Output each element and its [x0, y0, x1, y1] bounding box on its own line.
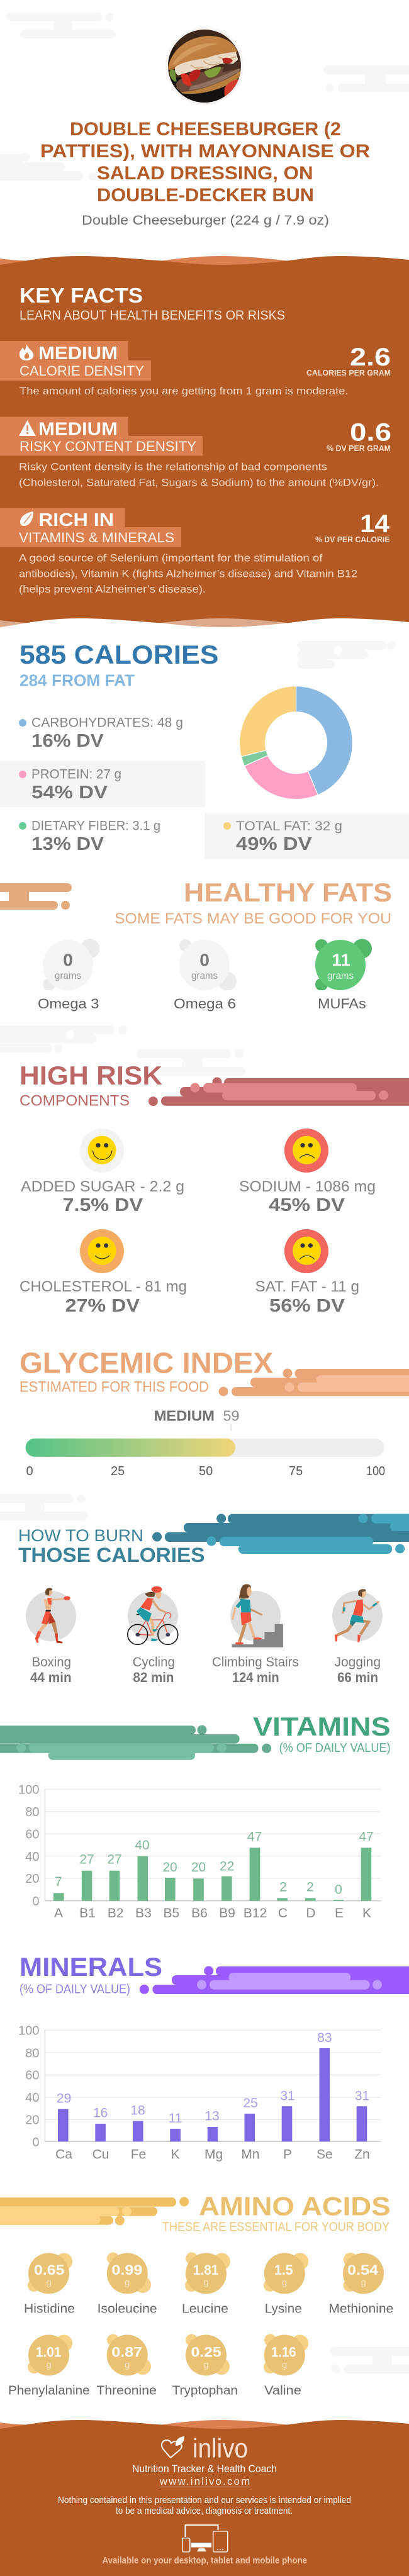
- bubble: omega 3: 0: [63, 951, 73, 970]
- activity: boxing: Boxing: [32, 1655, 71, 1670]
- bar chart: vitamins: 47: [359, 1830, 374, 1844]
- bar chart: minerals: Ca: [55, 2148, 72, 2162]
- bar chart: vitamins: 20: [162, 1860, 177, 1875]
- bar chart: vitamins: C: [278, 1906, 288, 1921]
- bubble: histidine: [24, 2253, 75, 2316]
- activity: climbing stairs: [212, 1584, 299, 1685]
- fact: rich in vitamins and minerals: A good source of Selenium (important for the stimulation of: [19, 552, 323, 564]
- heading: key facts: LEARN ABOUT HEALTH BENEFITS OR RISKS: [20, 308, 285, 323]
- bubble: methionine: g: [361, 2277, 366, 2288]
- bubble: histidine: Histidine: [24, 2302, 75, 2316]
- title: [40, 119, 370, 206]
- text: disclaimer: Nothing contained in this presentation and our services is intended or implied: [58, 2495, 351, 2506]
- icon: woman on stairs: [232, 1584, 283, 1648]
- heading: high risk: COMPONENTS: [20, 1093, 130, 1110]
- bar chart: vitamins: D: [306, 1906, 316, 1921]
- icon: flame: [20, 344, 33, 360]
- bubble: valine: [264, 2334, 308, 2398]
- bar chart: minerals: 100: [18, 2024, 39, 2038]
- fact: calorie density: MEDIUM: [38, 343, 118, 364]
- title: PATTIES), WITH MAYONNAISE OR: [40, 141, 370, 162]
- heading: minerals: MINERALS: [20, 1952, 162, 1982]
- bubble: omega 3: grams: [55, 971, 81, 981]
- bar chart: minerals: 83: [317, 2031, 332, 2045]
- bubble: isoleucine: g: [125, 2277, 130, 2288]
- item: sodium: [239, 1129, 376, 1215]
- bar chart: vitamins: 7: [55, 1875, 62, 1889]
- legend: dietary fiber: DIETARY FIBER: 3.1 g: [31, 819, 160, 834]
- bar chart: vitamins: B5: [164, 1906, 179, 1921]
- heading: burn calories: [18, 1526, 205, 1566]
- decorative band: [0, 1725, 271, 1760]
- bar chart: minerals: 29: [57, 2091, 71, 2105]
- heading: burn calories: HOW TO BURN: [18, 1526, 143, 1545]
- legend: total fat: TOTAL FAT: 32 g: [236, 819, 342, 834]
- bubble: lysine: g: [282, 2277, 287, 2288]
- fact: calorie density: [0, 341, 391, 397]
- activity: climbing stairs: Climbing Stairs: [212, 1655, 299, 1670]
- gauge: glycemic value: 59: [223, 1408, 239, 1424]
- item: added sugar: 7.5% DV: [63, 1195, 143, 1215]
- bar chart: vitamins: 0: [32, 1895, 39, 1909]
- bar chart: minerals: 25: [243, 2096, 258, 2110]
- panel: glycemic index: [20, 1346, 409, 1478]
- bar chart: vitamins: A: [54, 1906, 63, 1921]
- item: sodium: 45% DV: [269, 1195, 345, 1215]
- bubble: omega 6: grams: [191, 971, 218, 981]
- heading: vitamins: [253, 1712, 391, 1755]
- heading: healthy fats: HEALTHY FATS: [184, 878, 392, 907]
- activity: jogging: [332, 1589, 383, 1685]
- item: cholesterol: [20, 1229, 187, 1316]
- bubble: lysine: [264, 2253, 308, 2316]
- fact: rich in vitamins and minerals: [0, 508, 390, 595]
- bubble: leucine: Leucine: [182, 2302, 228, 2316]
- panel: how to burn those calories: [18, 1514, 409, 1685]
- bar chart: vitamins: B3: [135, 1906, 152, 1921]
- heading: vitamins: VITAMINS: [253, 1712, 391, 1741]
- bar chart: minerals: 40: [25, 2091, 39, 2105]
- panel: calories: [0, 640, 409, 859]
- item: saturated fat: [255, 1229, 359, 1316]
- fact: rich in vitamins and minerals: VITAMINS & MINERALS: [19, 530, 174, 545]
- bar chart: minerals: 0: [32, 2136, 39, 2149]
- icon: cyclist: [128, 1586, 178, 1644]
- item: cholesterol: CHOLESTEROL - 81 mg: [20, 1278, 187, 1295]
- legend: dietary fiber: [19, 819, 160, 854]
- donut chart: [240, 686, 352, 800]
- text: disclaimer: to be a medical advice, diagnosis or treatment.: [116, 2506, 293, 2516]
- legend: protein: 54% DV: [31, 783, 108, 803]
- item: cholesterol: 27% DV: [65, 1296, 140, 1316]
- heading: calories: 585 CALORIES: [20, 640, 218, 669]
- activity: cycling: 82 min: [133, 1670, 174, 1685]
- legend: protein: PROTEIN: 27 g: [31, 767, 121, 782]
- title: DOUBLE-DECKER BUN: [97, 185, 314, 206]
- heading: glycemic index: GLYCEMIC INDEX: [20, 1346, 273, 1379]
- bubble: methionine: Methionine: [328, 2302, 393, 2316]
- activity: cycling: Cycling: [133, 1655, 175, 1670]
- fact: rich in vitamins and minerals: % DV PER CALORIE: [315, 535, 390, 544]
- activity: jogging: Jogging: [335, 1655, 381, 1670]
- heading: vitamins: (% OF DAILY VALUE): [279, 1741, 391, 1755]
- bubble: tryptophan: g: [203, 2360, 209, 2370]
- bubble: isoleucine: [98, 2252, 157, 2316]
- bar chart: vitamins: B9: [219, 1906, 235, 1921]
- bar chart: minerals: Zn: [354, 2148, 370, 2162]
- gauge: glycemic value: 100: [366, 1464, 385, 1478]
- bar chart: minerals: 18: [130, 2104, 145, 2118]
- bar chart: vitamins: E: [335, 1906, 344, 1921]
- bar chart: vitamins: 0: [335, 1883, 342, 1897]
- fact: rich in vitamins and minerals: 14: [360, 510, 390, 538]
- fact: risky content density: (Cholesterol, Saturated Fat, Sugars & Sodium) to the amount (%DV/gr).: [19, 477, 379, 488]
- icon: leaf: [20, 511, 33, 526]
- bar chart: vitamins: 27: [107, 1853, 122, 1867]
- legend: carbohydrates: 16% DV: [31, 731, 104, 751]
- bar chart: minerals: 11: [169, 2111, 182, 2126]
- gauge: glycemic value: [26, 1408, 385, 1478]
- heading: calories: 284 FROM FAT: [20, 671, 135, 690]
- bubble: threonine: [96, 2334, 157, 2398]
- icon: warning: [19, 420, 36, 436]
- activity: boxing: [26, 1588, 76, 1685]
- title: DOUBLE CHEESEBURGER (2: [70, 119, 341, 140]
- activity: climbing stairs: 124 min: [232, 1670, 279, 1685]
- bar chart: vitamins: 40: [25, 1850, 39, 1864]
- bar chart: vitamins: 22: [220, 1859, 234, 1873]
- bubble: leucine: g: [203, 2277, 209, 2288]
- legend: carbohydrates: CARBOHYDRATES: 48 g: [31, 716, 183, 730]
- bubble: threonine: 0.87: [111, 2345, 142, 2360]
- gauge: glycemic value: 75: [289, 1464, 303, 1478]
- bar chart: minerals: 31: [280, 2088, 295, 2103]
- bar chart: vitamins: B1: [79, 1906, 96, 1921]
- bubble: tryptophan: [172, 2334, 238, 2398]
- bar chart: minerals: 20: [25, 2114, 39, 2127]
- bar chart: minerals: Mg: [204, 2148, 223, 2162]
- fact: risky content density: % DV PER GRAM: [327, 443, 391, 453]
- bar chart: minerals: 13: [204, 2109, 220, 2124]
- legend: dietary fiber: 13% DV: [31, 834, 104, 854]
- bubble: methionine: 0.54: [347, 2262, 379, 2278]
- heading: high risk: [20, 1061, 162, 1110]
- fact: risky content density: RISKY CONTENT DENSITY: [20, 438, 196, 454]
- bubble: valine: 1.16: [271, 2345, 296, 2360]
- section: header: [0, 13, 409, 228]
- activity: boxing: 44 min: [30, 1670, 72, 1685]
- bubble: methionine: [328, 2253, 393, 2316]
- gauge: glycemic value: 0: [26, 1464, 33, 1478]
- item: added sugar: ADDED SUGAR - 2.2 g: [21, 1178, 184, 1195]
- link: website: www.inlivo.com: [159, 2475, 250, 2487]
- text: availability: Available on your desktop, tablet and mobile phone: [102, 2555, 307, 2566]
- bar chart: minerals: 16: [93, 2106, 108, 2121]
- fact: calorie density: CALORIE DENSITY: [20, 363, 144, 379]
- bubble: isoleucine: 0.99: [111, 2262, 142, 2278]
- fact: calorie density: 2.6: [350, 343, 391, 371]
- fact: rich in vitamins and minerals: RICH IN: [38, 510, 114, 530]
- bubble: mufas: [315, 939, 372, 1012]
- item: sodium: SODIUM - 1086 mg: [239, 1178, 376, 1195]
- heading: calories: [20, 640, 218, 690]
- bar chart: minerals: Cu: [92, 2148, 109, 2162]
- decorative band: [140, 1966, 409, 1994]
- decorative band: [219, 1369, 409, 1397]
- bubble: leucine: 1.81: [193, 2262, 218, 2278]
- fact: risky content density: Risky Content density is the relationship of bad components: [19, 462, 327, 473]
- bar chart: vitamins: [18, 1783, 381, 1921]
- heading: amino acids: THESE ARE ESSENTIAL FOR YOUR BODY: [162, 2221, 389, 2234]
- bubble: mufas: MUFAs: [318, 996, 366, 1012]
- bubble: lysine: Lysine: [265, 2302, 302, 2316]
- bar chart: minerals: P: [283, 2148, 292, 2162]
- image: burger: [164, 25, 245, 107]
- logo: inlivo: inlivo: [193, 2434, 248, 2464]
- bar chart: vitamins: 2: [306, 1880, 314, 1895]
- bubble: histidine: 0.65: [34, 2262, 64, 2278]
- logo: inlivo: [162, 2434, 248, 2464]
- heading: amino acids: [162, 2192, 391, 2234]
- bubble: phenylalanine: [8, 2335, 90, 2398]
- heading: glycemic index: ESTIMATED FOR THIS FOOD: [20, 1379, 209, 1396]
- heading: amino acids: AMINO ACIDS: [199, 2192, 391, 2221]
- decorative band: [152, 1514, 409, 1554]
- panel: healthy fats: [0, 878, 392, 1012]
- bar chart: minerals: Se: [317, 2148, 333, 2162]
- fact: rich in vitamins and minerals: (helps prevent Alzheimer’s disease).: [19, 584, 206, 595]
- bar chart: vitamins: 80: [25, 1805, 39, 1819]
- bubble: phenylalanine: 1.01: [36, 2345, 61, 2360]
- fact: risky content density: 0.6: [350, 418, 391, 446]
- gauge: glycemic value: MEDIUM: [154, 1408, 215, 1424]
- bar chart: vitamins: 60: [25, 1828, 39, 1842]
- text: disclaimer: [58, 2495, 351, 2516]
- panel: vitamins: [0, 1712, 391, 1921]
- heading: key facts: KEY FACTS: [20, 284, 143, 307]
- icon: devices: [182, 2525, 228, 2552]
- bubble: mufas: 11: [332, 951, 350, 970]
- decorative band: [0, 2197, 189, 2226]
- heading: healthy fats: SOME FATS MAY BE GOOD FOR YOU: [115, 910, 391, 927]
- panel: key facts: [0, 256, 409, 632]
- bar chart: vitamins: 100: [18, 1783, 39, 1797]
- heading: burn calories: THOSE CALORIES: [18, 1544, 205, 1566]
- icon: boxer: [35, 1588, 70, 1643]
- heading: healthy fats: [115, 878, 392, 927]
- text: tagline: Nutrition Tracker & Health Coach: [132, 2463, 277, 2475]
- bar chart: minerals: 80: [25, 2047, 39, 2061]
- bubble: omega 6: 0: [199, 951, 210, 970]
- bubble: phenylalanine: Phenylalanine: [8, 2384, 90, 2398]
- fact: risky content density: [0, 416, 391, 488]
- bubble: threonine: Threonine: [96, 2384, 157, 2398]
- bar chart: vitamins: 40: [135, 1838, 150, 1853]
- bubble: omega 3: Omega 3: [38, 996, 99, 1012]
- legend: total fat: [223, 819, 342, 854]
- icon: jogger: [335, 1589, 379, 1642]
- bubble: valine: Valine: [264, 2384, 301, 2398]
- fact: calorie density: The amount of calories you are getting from 1 gram is moderate.: [20, 386, 349, 397]
- decorative band: [148, 1077, 409, 1106]
- bar chart: minerals: 60: [25, 2068, 39, 2082]
- bubble: phenylalanine: g: [46, 2360, 52, 2370]
- bar chart: vitamins: 20: [25, 1872, 39, 1886]
- subtitle: Double Cheeseburger (224 g / 7.9 oz): [82, 213, 329, 228]
- panel: amino acids: [0, 2192, 409, 2398]
- heading: minerals: [20, 1952, 162, 1996]
- bubble: valine: g: [282, 2360, 287, 2370]
- legend: total fat: 49% DV: [236, 834, 312, 854]
- panel: minerals: [18, 1952, 409, 2162]
- bar chart: minerals: 31: [355, 2088, 369, 2103]
- item: saturated fat: SAT. FAT - 11 g: [255, 1278, 359, 1295]
- gauge: glycemic value: 50: [199, 1464, 213, 1478]
- gauge: glycemic value: 25: [111, 1464, 125, 1478]
- bubble: omega 3: [38, 939, 99, 1012]
- bubble: histidine: g: [46, 2277, 52, 2288]
- bar chart: vitamins: B2: [108, 1906, 124, 1921]
- decorative band: [0, 883, 72, 910]
- bar chart: minerals: Mn: [241, 2148, 260, 2162]
- bar chart: vitamins: 20: [191, 1860, 206, 1875]
- panel: footer: [0, 2420, 409, 2576]
- bubble: omega 6: Omega 6: [174, 996, 236, 1012]
- bar chart: minerals: Fe: [131, 2148, 146, 2162]
- bubble: tryptophan: Tryptophan: [172, 2384, 238, 2398]
- bubble: lysine: 1.5: [274, 2262, 293, 2278]
- bar chart: vitamins: K: [362, 1906, 371, 1921]
- bar chart: minerals: K: [171, 2148, 180, 2162]
- bubble: omega 6: [174, 939, 237, 1012]
- panel: high risk components: [20, 1061, 409, 1316]
- bar chart: vitamins: 47: [247, 1830, 262, 1844]
- heading: high risk: HIGH RISK: [20, 1061, 162, 1090]
- heading: glycemic index: [20, 1346, 273, 1396]
- bar chart: vitamins: 27: [79, 1853, 94, 1867]
- bar chart: vitamins: 2: [279, 1880, 287, 1895]
- bubble: isoleucine: Isoleucine: [98, 2302, 157, 2316]
- legend: protein: [19, 767, 121, 803]
- bubble: mufas: grams: [327, 971, 354, 981]
- item: saturated fat: 56% DV: [269, 1296, 345, 1316]
- fact: calorie density: CALORIES PER GRAM: [306, 368, 391, 377]
- legend: carbohydrates: [19, 716, 183, 751]
- item: added sugar: [21, 1129, 184, 1215]
- activity: jogging: 66 min: [337, 1670, 378, 1685]
- bar chart: vitamins: B6: [191, 1906, 208, 1921]
- bar chart: vitamins: B12: [244, 1906, 267, 1921]
- activity: cycling: [128, 1586, 178, 1685]
- bar chart: minerals: [18, 2024, 381, 2162]
- heading: minerals: (% OF DAILY VALUE): [20, 1982, 130, 1996]
- bubble: tryptophan: 0.25: [191, 2345, 221, 2360]
- bubble: leucine: [182, 2252, 230, 2316]
- bubble: threonine: g: [125, 2360, 130, 2370]
- title: SALAD DRESSING, ON: [97, 163, 313, 184]
- fact: rich in vitamins and minerals: antibodies), Vitamin K (fights Alzheimer’s disease) and Vitamin B12: [19, 568, 357, 579]
- heading: key facts: [20, 284, 285, 323]
- fact: risky content density: MEDIUM: [38, 420, 118, 440]
